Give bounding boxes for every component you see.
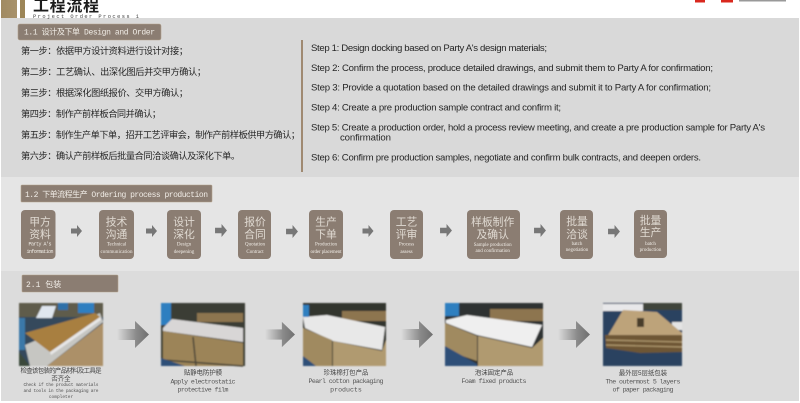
caption: antistatic film: Apply electrostatic [170,378,236,386]
photo: antistatic film [161,303,245,366]
caption: antistatic film: 贴静电防护膜 [184,368,223,376]
English steps: Step 4: Create a pre production sample contract and confirm it; [311,102,561,114]
step: batch negotiation: 批量 [566,214,588,228]
step: batch production: production [640,248,662,253]
arrow [215,224,227,237]
step: batch production: 批量 [640,213,661,227]
arrow [440,224,452,237]
Chinese steps: 第一步：依据甲方设计资料进行设计对接； [21,45,188,56]
English steps: Step 3: Provide a quotation based on the detailed drawings and submit it to Party A for confirmation; [311,82,711,94]
caption: check materials: Check if the product materials [24,382,99,388]
heading tag 1.1 [18,24,161,40]
photo: checking materials [19,303,103,366]
header brown blocks [1,0,25,18]
panel: packaging [19,275,682,400]
heading tag 1.1: 1.1 设计及下单 Design and Order [24,26,155,38]
caption: check materials: and tools in the packaging are [24,388,99,394]
step: design deepening [167,210,201,259]
caption: check materials: completer [49,394,73,400]
English steps [311,43,765,164]
arrow [534,224,546,237]
caption: outer paper packaging: of paper packaging [612,386,674,394]
heading tag 1.2: 1.2 下单流程生产 Ordering process production [25,189,208,200]
caption: outer paper packaging: 最外层5层纸包装 [619,368,668,377]
caption: check materials: 否齐全 [51,374,71,382]
step: process assess: Process [399,242,414,248]
step: batch negotiation: batch [572,242,583,247]
step: quotation contract: 合同 [244,227,266,241]
step: production order placement: 下单 [315,228,337,241]
logo fragment [695,0,786,2]
Chinese steps: 第三步：根据深化图纸报价、交甲方确认； [21,87,188,98]
English steps: Step 5: Create a production order, hold a process review meeting, and create a pre production sample for Party A's [311,122,765,134]
English steps: Step 2: Confirm the process, produce detailed drawings, and submit them to Party A for confirmation; [311,63,713,74]
arrow [286,225,298,238]
caption: foam fixed [462,368,527,385]
step: batch negotiation: 洽谈 [566,228,588,241]
big arrow [117,321,149,348]
step: process assess: assess [400,250,413,255]
arrow [71,225,82,237]
step: production order placement [309,210,343,259]
Chinese steps: 第二步：工艺确认、出深化图后并交甲方确认； [21,66,206,77]
arrow [608,225,620,238]
step: technical communication: 沟通 [106,228,127,241]
step: sample production and confirmation [467,210,520,259]
photo: outer paper packaging [603,303,682,366]
caption: pearl cotton: Pearl cotton packaging [308,378,384,385]
header [1,0,786,20]
step: production order placement: Production [315,242,337,248]
step: Party A information: Party A's [28,242,52,248]
step: quotation contract [238,210,271,259]
caption: foam fixed: Foam fixed products [462,378,527,385]
caption: pearl cotton: products [330,386,362,394]
step: quotation contract: 报价 [244,214,266,228]
Chinese steps: 第六步：确认产前样板后批量合同洽谈确认及深化下单。 [21,150,240,161]
caption: pearl cotton [308,368,384,394]
arrow [146,225,157,237]
Chinese steps [21,45,300,161]
step: design deepening: deepening [174,250,195,255]
step: sample production and confirmation: 及确认 [477,228,509,241]
caption: pearl cotton: 珍珠棉打包产品 [324,368,368,376]
step: batch production [634,210,667,258]
step: batch negotiation [560,210,593,259]
big arrow [401,321,433,348]
heading tag 2.1 [22,275,118,292]
step: batch negotiation: negotiation [566,248,589,253]
step: Party A information: 甲方 [29,214,51,228]
step: design deepening: 深化 [173,227,195,241]
panel: design and order [18,24,765,172]
step: quotation contract: Contract [246,250,264,255]
English steps: Step 6: Confirm pre production samples, negotiate and confirm bulk contracts, and deepen orders. [311,152,701,164]
Chinese steps: 第四步：制作产前样板合同并确认； [21,108,161,119]
step: Party A information: information [26,249,54,255]
arrow [362,225,374,237]
panel: ordering process [21,185,667,259]
photo: pearl cotton packaging [303,303,386,366]
caption: check materials [20,366,102,400]
English steps: confirmation [340,132,391,144]
English steps: Step 1: Design docking based on Party A's design materials; [311,43,547,54]
caption: antistatic film: protective film [178,386,229,394]
caption: check materials: 检查该包装的产品材料及工具是 [20,366,102,374]
caption: outer paper packaging [606,368,681,394]
step: technical communication: 技术 [106,216,127,228]
divider bar [301,40,303,172]
heading tag 1.2 [21,185,212,202]
subtitle: Project Order Process 1 [33,14,139,20]
caption: antistatic film [170,368,236,394]
step: production order placement: order placement [310,250,342,255]
step: production order placement: 生产 [315,214,337,228]
step: Party A information [21,210,56,259]
photo: foam fixed [445,303,543,366]
step: design deepening: Design [177,242,192,248]
big arrow [265,322,295,347]
step: process assess [390,210,423,259]
caption: outer paper packaging: The outermost 5 layers [606,378,681,386]
step: technical communication: communication [100,250,133,255]
heading tag 2.1: 2.1 包装 [26,279,61,290]
step: process assess: 评审 [396,227,417,241]
step: process assess: 工艺 [396,216,417,228]
step: quotation contract: Quotation [245,242,265,248]
Chinese steps: 第五步：制作生产单下单，招开工艺评审会，制作产前样板供甲方确认； [21,129,300,140]
step: batch production: 生产 [640,225,661,239]
caption: foam fixed: 泡沫固定产品 [475,368,513,376]
step: sample production and confirmation: Sample production [474,243,512,248]
big arrow [558,321,590,348]
step: design deepening: 设计 [173,216,195,228]
step: batch production: batch [645,242,656,247]
step: sample production and confirmation: 样板制作 [471,214,514,228]
step: technical communication: Technical [107,242,127,248]
step: Party A information: 资料 [29,227,51,241]
step: technical communication [99,210,134,259]
step: sample production and confirmation: and confirmation [476,249,510,254]
